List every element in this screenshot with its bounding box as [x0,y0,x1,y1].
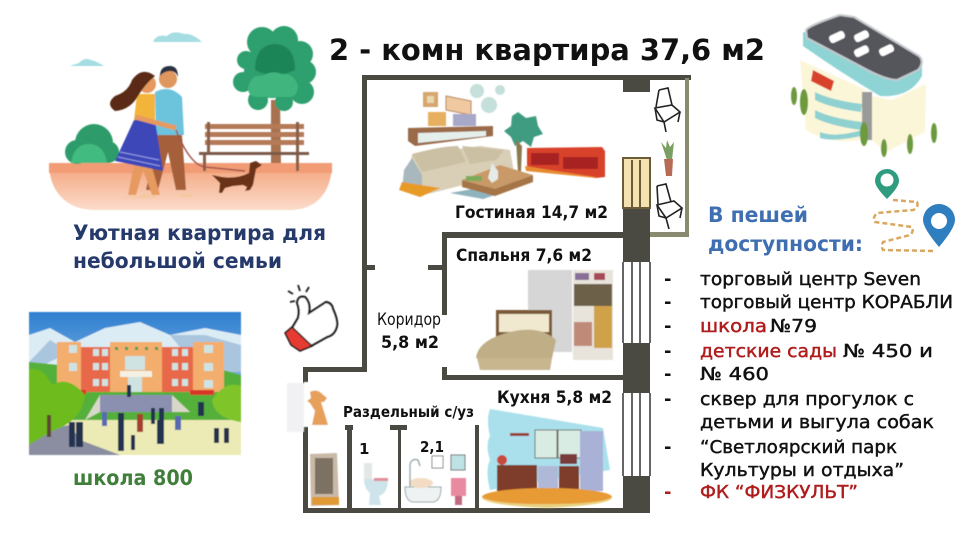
room label: bedroom: Спальня 7,6 м2 [456,246,592,266]
room label: toilet area: 1 [359,440,369,458]
furniture: wardrobe, toilet, bath [310,453,466,506]
caption: cosy apartment: Уютная квартира для [73,221,326,245]
illustration: couple walking dog in park [49,26,332,210]
window: bedroom [623,262,650,343]
list: nearby places: ФК “ФИЗКУЛЬТ” [700,482,858,503]
room label: separate bathroom: Раздельный с/уз [343,403,474,421]
window: kitchen [623,393,650,476]
caption: school distance: школа 800 [73,466,193,490]
room label: corridor area: 5,8 м2 [381,333,439,353]
list: nearby places: торговый центр КОРАБЛИ [700,292,953,313]
list: nearby places: - [664,437,671,458]
illustration: shopping mall [791,15,937,157]
heading: within walking distance: В пешей [708,203,808,227]
room label: corridor: Коридор [377,310,441,330]
title: 2 - комн квартира 37,6 м2 [329,33,765,67]
list: nearby places: - [664,341,671,362]
list: nearby places [664,269,953,503]
furniture: balcony chairs and plant [655,88,682,229]
room label: kitchen: Кухня 5,8 м2 [497,388,612,408]
list: nearby places: - [664,292,671,313]
list: nearby places: № 460 [700,364,769,385]
list: nearby places: сквер для прогулок с [700,389,914,410]
room label: living room: Гостиная 14,7 м2 [455,203,608,223]
list: nearby places: детские сады [700,341,837,362]
heading: within walking distance [708,203,863,256]
floor plan walls [303,75,691,513]
list: nearby places: - [664,316,671,337]
list: nearby places: Культуры и отдыха” [700,460,904,481]
window: balcony door [623,158,650,208]
heading: within walking distance: доступности: [708,232,863,256]
list: nearby places: №79 [770,316,817,337]
caption: cosy apartment [73,221,326,273]
grey door patch with dog [287,382,332,432]
list: nearby places: - [664,269,671,290]
list: nearby places: № 450 и [843,341,933,362]
list: nearby places: “Светлоярский парк [700,437,897,458]
illustration: school building [29,312,241,455]
list: nearby places: - [664,389,671,410]
list: nearby places: - [664,364,671,385]
icon: route with map pins [874,169,955,251]
list: nearby places: детьми и выгула собак [700,412,934,433]
furniture: living room [399,84,605,199]
list: nearby places: - [664,482,671,503]
list: nearby places: торговый центр Seven [700,269,921,290]
list: nearby places: школа [700,316,767,337]
icon: thumbs up hand [285,285,337,351]
furniture: bedroom [476,270,613,370]
furniture: kitchen [482,409,612,508]
room label: bath area: 2,1 [420,438,444,456]
caption: cosy apartment: небольшой семьи [73,249,282,273]
